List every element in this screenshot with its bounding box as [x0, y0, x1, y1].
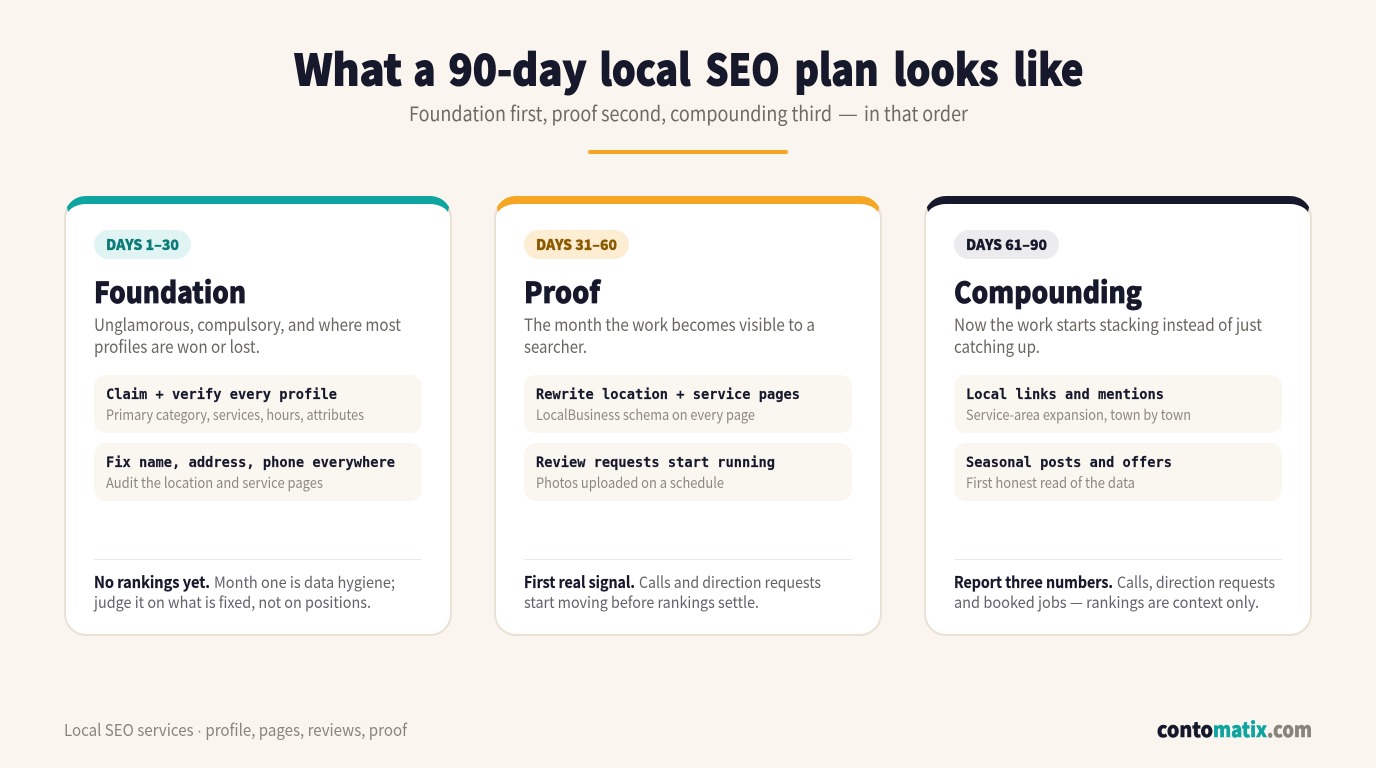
- badge: days 31-60: [524, 230, 629, 259]
- title: What: [294, 36, 402, 98]
- title: local: [600, 36, 690, 98]
- task: fix NAP: Fix name, address, phone everywhere: [106, 454, 395, 471]
- accent rule: [588, 150, 788, 154]
- badge: days 61-90: DAYS 61–90: [966, 234, 1047, 255]
- description: Now the work starts stacking instead of just: [954, 311, 1263, 336]
- takeaway note: [93, 570, 395, 613]
- description: The month the work becomes visible to a: [524, 311, 815, 336]
- badge: days 31-60: DAYS 31–60: [536, 234, 617, 255]
- title: 90-day: [448, 36, 587, 98]
- subtitle: in that order: [864, 98, 968, 127]
- description: [94, 311, 402, 358]
- badge: days 1-30: DAYS 1–30: [106, 234, 179, 255]
- takeaway note: Calls and direction requests: [639, 570, 821, 593]
- takeaway note: Report three numbers.: [954, 570, 1113, 593]
- task: rewrite pages: LocalBusiness schema on every page: [536, 404, 755, 425]
- subtitle: —: [838, 98, 858, 127]
- panel: Foundation: [64, 196, 452, 636]
- task: local links: Local links and mentions: [966, 386, 1164, 403]
- task: local links: Service-area expansion, town by town: [966, 404, 1191, 425]
- task: review requests: Photos uploaded on a schedule: [536, 472, 724, 493]
- title: SEO: [706, 36, 780, 98]
- footer services line: Local SEO services · profile, pages, reviews, proof: [64, 717, 408, 741]
- task: seasonal posts: First honest read of the data: [966, 472, 1135, 493]
- title: like: [1014, 36, 1084, 98]
- task: fix NAP: [94, 443, 422, 501]
- takeaway note: Calls, direction requests: [1117, 570, 1275, 593]
- takeaway note: judge it on what is fixed, not on positions.: [93, 590, 371, 613]
- description: catching up.: [954, 333, 1040, 358]
- title: a: [414, 36, 436, 98]
- description: profiles are won or lost.: [94, 333, 260, 358]
- takeaway note: [954, 570, 1275, 613]
- takeaway note: [524, 570, 821, 613]
- description: Unglamorous, compulsory, and where most: [94, 311, 402, 336]
- description: searcher.: [524, 333, 587, 358]
- task: local links: [954, 375, 1282, 433]
- description: [524, 311, 815, 358]
- task: claim and verify: Primary category, services, hours, attributes: [106, 404, 364, 425]
- task: seasonal posts: [954, 443, 1282, 501]
- brand wordmark: [1157, 713, 1312, 743]
- task: seasonal posts: Seasonal posts and offers: [966, 454, 1172, 471]
- takeaway note: First real signal.: [524, 570, 635, 593]
- takeaway note: and booked jobs — rankings are context only.: [954, 590, 1259, 613]
- panel: Proof: [494, 196, 882, 636]
- task: rewrite pages: Rewrite location + service pages: [536, 386, 800, 403]
- heading: Foundation: Foundation: [94, 270, 246, 312]
- heading: Compounding: Compounding: [954, 270, 1142, 312]
- title: plan: [794, 36, 878, 98]
- title: [294, 36, 1084, 98]
- heading: Proof: Proof: [524, 270, 601, 312]
- task: claim and verify: [94, 375, 422, 433]
- takeaway note: Month one is data hygiene;: [214, 570, 395, 593]
- page footer: [64, 713, 1312, 743]
- takeaway note: start moving before rankings settle.: [524, 590, 759, 613]
- brand wordmark: matix: [1213, 713, 1267, 743]
- brand wordmark: conto: [1157, 713, 1213, 743]
- description: [954, 311, 1263, 358]
- badge: days 61-90: [954, 230, 1059, 259]
- task: fix NAP: Audit the location and service pages: [106, 472, 323, 493]
- task: review requests: [524, 443, 852, 501]
- task: claim and verify: Claim + verify every profile: [106, 386, 337, 403]
- takeaway note: No rankings yet.: [94, 570, 210, 593]
- page header: [294, 36, 1084, 154]
- panel: Compounding: [924, 196, 1312, 636]
- subtitle: Foundation first, proof second, compounding third: [409, 98, 832, 127]
- title: looks: [894, 36, 998, 98]
- task: review requests: Review requests start running: [536, 454, 775, 471]
- brand wordmark: .com: [1267, 713, 1312, 743]
- task: rewrite pages: [524, 375, 852, 433]
- badge: days 1-30: [94, 230, 191, 259]
